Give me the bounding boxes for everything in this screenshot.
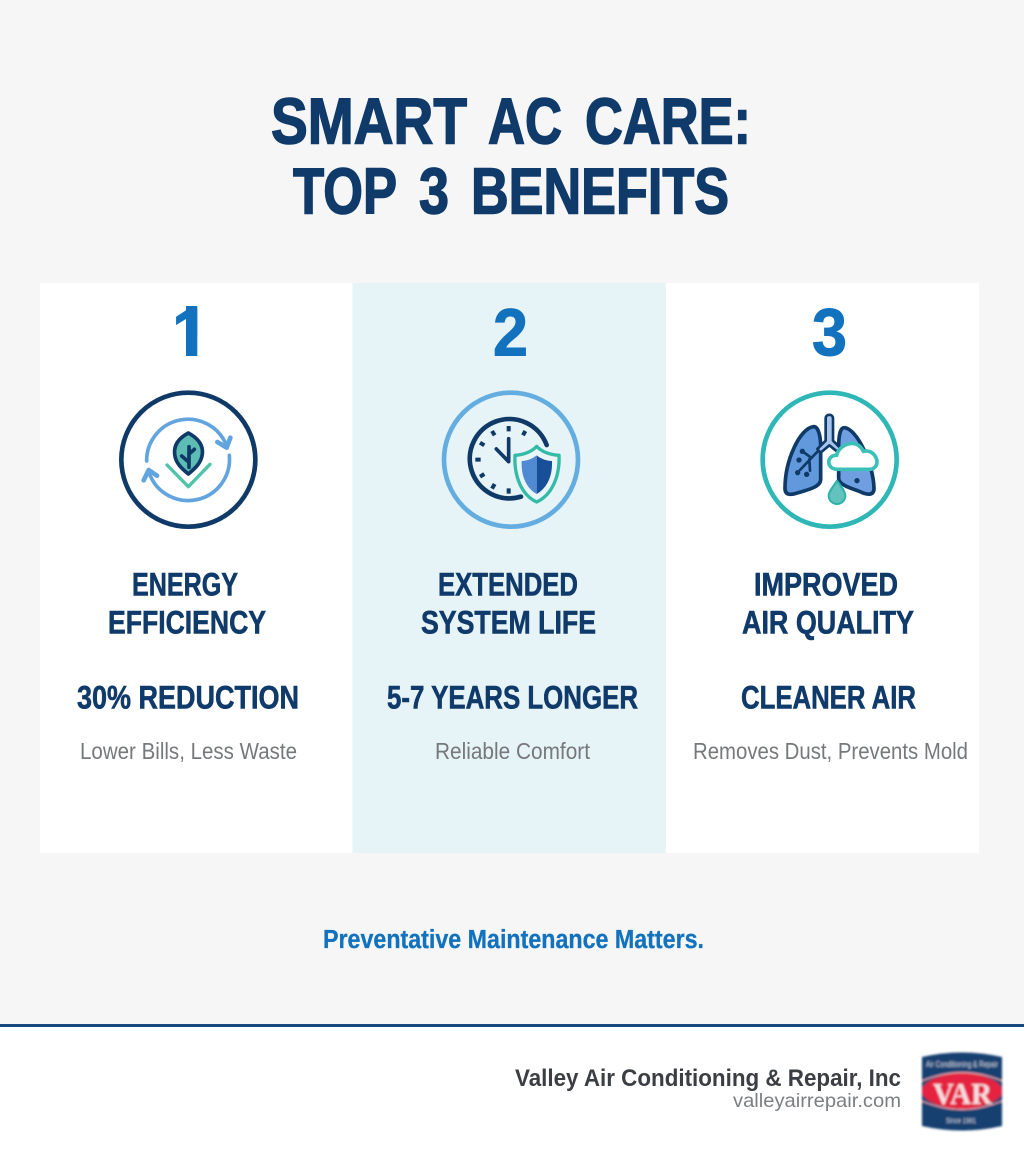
number 1 bbox=[176, 306, 198, 356]
heading: extended system life: EXTENDED bbox=[438, 566, 578, 602]
panel: extended system life bbox=[352, 283, 666, 853]
number 1: 1 bbox=[172, 296, 209, 370]
icon: leaf with recycling arrows bbox=[121, 393, 255, 527]
description: removes dust: Removes Dust, Prevents Mold bbox=[693, 738, 968, 764]
stat: 30% reduction: 30% REDUCTION bbox=[77, 680, 299, 716]
logo: Air Conditioning & Repair bbox=[926, 1060, 998, 1069]
heading: improved air quality: IMPROVED bbox=[754, 566, 898, 602]
tagline: Preventative Maintenance Matters. bbox=[323, 926, 704, 954]
heading: energy efficiency: ENERGY bbox=[132, 566, 238, 602]
heading: improved air quality: AIR QUALITY bbox=[742, 604, 914, 640]
heading: improved air quality bbox=[742, 566, 914, 640]
description: reliable comfort: Reliable Comfort bbox=[435, 738, 590, 764]
heading: energy efficiency: EFFICIENCY bbox=[108, 604, 266, 640]
logo: Since 1981 bbox=[946, 1118, 976, 1125]
website: valleyairrepair.com bbox=[733, 1090, 901, 1112]
icon: lungs with cloud and drop bbox=[763, 393, 897, 527]
icon: clock with shield bbox=[444, 393, 578, 527]
stat: 5-7 years longer: 5-7 YEARS LONGER bbox=[387, 680, 638, 716]
heading: energy efficiency bbox=[108, 566, 266, 640]
heading: extended system life bbox=[421, 566, 596, 640]
title: 3 bbox=[419, 154, 449, 228]
title bbox=[271, 84, 751, 228]
title: BENEFITS bbox=[471, 154, 729, 228]
title: SMART bbox=[271, 84, 467, 158]
heading: extended system life: SYSTEM LIFE bbox=[421, 604, 596, 640]
panel: improved air quality bbox=[666, 283, 979, 853]
number 3: 3 bbox=[812, 296, 847, 370]
title: CARE: bbox=[585, 84, 751, 158]
number 2: 2 bbox=[493, 296, 528, 370]
logo: VAR bbox=[933, 1076, 993, 1111]
panel: energy efficiency bbox=[40, 283, 352, 853]
logo bbox=[922, 1052, 1002, 1130]
title: TOP bbox=[293, 154, 397, 228]
description: lower bills: Lower Bills, Less Waste bbox=[80, 738, 297, 764]
stat: cleaner air: CLEANER AIR bbox=[741, 680, 916, 716]
title: AC bbox=[488, 84, 562, 158]
company name: Valley Air Conditioning & Repair, Inc bbox=[515, 1065, 901, 1092]
footer band bbox=[0, 1024, 1024, 1154]
